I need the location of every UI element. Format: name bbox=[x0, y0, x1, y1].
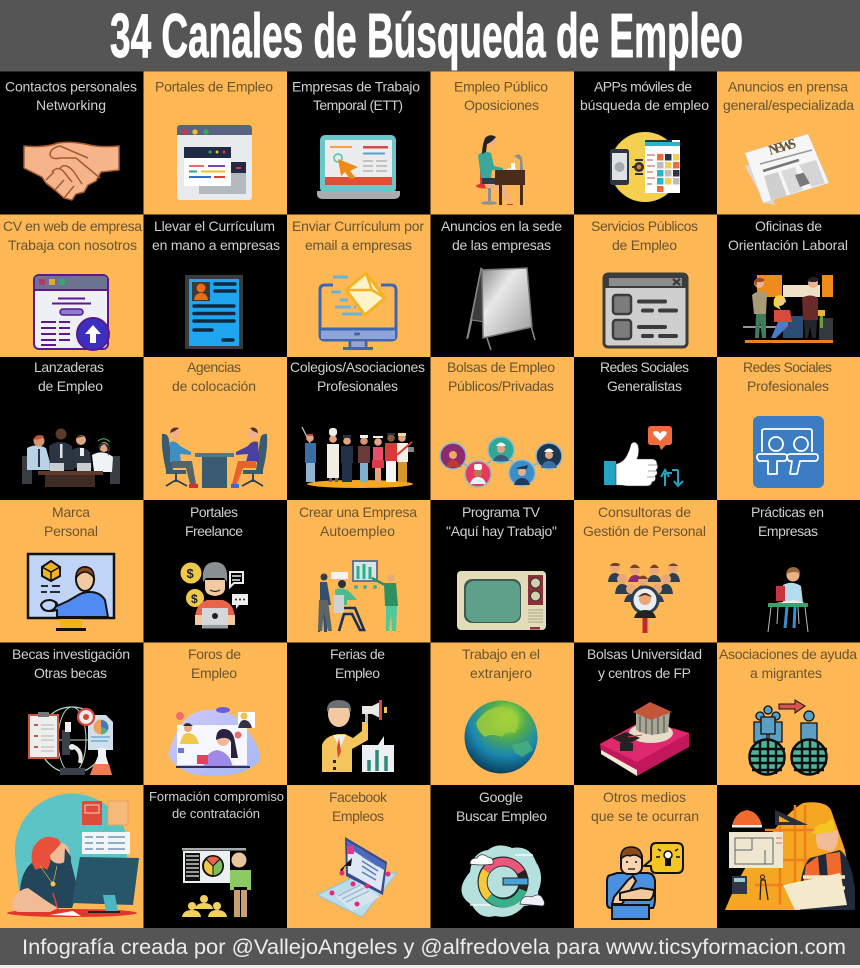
icon: gray window bbox=[604, 274, 687, 347]
panel: Becas investigación bbox=[0, 642, 144, 785]
panel: Redes Sociales Profesionales: Profesionales bbox=[747, 378, 829, 394]
icon: presenter with megaphone bbox=[322, 700, 394, 772]
panel: Empresas de Trabajo Temporal bbox=[287, 72, 430, 214]
icon: migrating people over globes bbox=[749, 700, 827, 775]
icon: team meeting bbox=[22, 428, 120, 487]
panel: Enviar Currículum por email: Enviar Currículum por bbox=[292, 218, 424, 234]
panel: Formación compromiso de contratación: Formación compromiso bbox=[149, 789, 284, 804]
icon: job interview bbox=[162, 428, 267, 488]
panel: Becas investigación: Otras becas bbox=[34, 665, 107, 681]
footer bar bbox=[0, 928, 860, 965]
icon: web form upload bbox=[34, 275, 109, 350]
panel: Consultoras de Gestión de Personal: Gestión de Personal bbox=[583, 523, 706, 539]
panel: Portales de Empleo: Portales de Empleo bbox=[155, 78, 273, 94]
icon: monitor with envelope bbox=[320, 273, 396, 348]
panel: Crear una Empresa: Autoempleo bbox=[320, 523, 395, 539]
panel: Ingeniero con planos bbox=[717, 785, 860, 928]
panel: Facebook Empleos bbox=[287, 785, 430, 928]
icon: laptop with cursor bbox=[317, 135, 400, 199]
panel: Empleo Público Oposiciones bbox=[430, 72, 574, 214]
panel: Anuncios en la sede: de las empresas bbox=[452, 237, 551, 253]
panel: Programa TV bbox=[430, 500, 574, 642]
icon: handshake bbox=[24, 142, 119, 200]
panel: Contactos personales Networking: Networking bbox=[36, 97, 106, 113]
panel: Facebook Empleos: Empleos bbox=[332, 808, 384, 824]
icon: woman on phone at computer bbox=[7, 794, 139, 917]
panel: Servicios Públicos de Empleo: de Empleo bbox=[612, 237, 677, 253]
panel: Asociaciones de ayuda a migrantes bbox=[717, 642, 860, 785]
icon: network of people bbox=[440, 437, 562, 487]
icon: university building on book bbox=[600, 702, 689, 776]
panel: Ferias de Empleo: Ferias de bbox=[330, 646, 385, 662]
panel: Redes Sociales Generalistas bbox=[574, 357, 717, 500]
panel: Colegios/Asociaciones Profesionales bbox=[287, 357, 430, 500]
panel: Foros de Empleo bbox=[144, 642, 287, 785]
panel: Otros medios: que se te ocurran bbox=[591, 808, 699, 824]
panel: Empleo Público Oposiciones: Empleo Público bbox=[454, 78, 548, 94]
panel: Foros de Empleo: Empleo bbox=[191, 665, 237, 681]
panel: Otros medios: Otros medios bbox=[603, 789, 686, 805]
panel: Anuncios en la sede: Anuncios en la sede bbox=[441, 218, 562, 234]
icon: monitor with person bbox=[28, 554, 114, 631]
panel: Consultoras de Gestión de Personal: Consultoras de bbox=[598, 504, 691, 520]
panel: Ferias de Empleo bbox=[287, 642, 430, 785]
panel: Anuncios en prensa bbox=[717, 72, 860, 214]
panel: Lanzaderas de Empleo: Lanzaderas bbox=[34, 359, 104, 375]
panel: Portales Freelance: Freelance bbox=[185, 523, 243, 539]
icon: resume sheet bbox=[185, 275, 243, 349]
panel: Oficinas de Orientación Laboral bbox=[717, 214, 860, 357]
icon: engineer with blueprints bbox=[725, 802, 855, 910]
panel: Crear una Empresa bbox=[287, 500, 430, 642]
panel: CV en web de empresa bbox=[0, 214, 144, 357]
panel: Anuncios en prensa: general/especializada bbox=[723, 97, 854, 113]
panel: Contactos personales Networking: Contactos personales bbox=[5, 78, 137, 94]
panel: Bolsas de Empleo bbox=[430, 357, 574, 500]
panel: Programa TV: "Aquí hay Trabajo" bbox=[446, 523, 557, 539]
panel: Crear una Empresa: Crear una Empresa bbox=[299, 504, 417, 520]
panel: Empleo Público Oposiciones: Oposiciones bbox=[464, 97, 539, 113]
icon: mobile apps circle bbox=[610, 132, 680, 202]
panel: Recepcionista al teléfono bbox=[0, 785, 144, 928]
panel: Redes Sociales Generalistas: Redes Sociales bbox=[600, 359, 689, 375]
panel: Bolsas Universidad bbox=[574, 642, 717, 785]
icon: retro television bbox=[457, 571, 546, 630]
panel: Facebook Empleos: Facebook bbox=[329, 789, 388, 805]
icon: blue rounded square with figures bbox=[753, 416, 824, 488]
panel: Lanzaderas de Empleo: de Empleo bbox=[38, 378, 103, 394]
panel: Empresas de Trabajo Temporal: Empresas de Trabajo bbox=[292, 78, 420, 94]
panel: Colegios/Asociaciones Profesionales: Colegios/Asociaciones bbox=[290, 359, 425, 375]
icon: isometric laptop bbox=[317, 837, 397, 917]
icon: thumbs up and heart bbox=[604, 426, 683, 486]
icon: thinking person with idea bubble bbox=[607, 843, 683, 919]
icon: freelancer: $ bbox=[186, 566, 194, 581]
panel: Prácticas en Empresas bbox=[717, 500, 860, 642]
panel: Bolsas de Empleo: Bolsas de Empleo bbox=[447, 359, 555, 375]
panel: Trabajo en el extranjero: Trabajo en el bbox=[462, 646, 540, 662]
icon: office people bbox=[743, 275, 833, 343]
panel: Enviar Currículum por email bbox=[287, 214, 430, 357]
panel: Formación compromiso de contratación bbox=[144, 785, 287, 928]
panel: Bolsas de Empleo: Públicos/Privadas bbox=[448, 378, 554, 394]
panel: APPs móviles: búsqueda de empleo bbox=[580, 97, 709, 113]
panel: Agencias de colocación bbox=[144, 357, 287, 500]
icon: candidate search bbox=[608, 563, 680, 633]
icon: newspaper: NEWS bbox=[767, 137, 798, 159]
icon: training presentation bbox=[182, 848, 251, 917]
panel: Becas investigación: Becas investigación bbox=[12, 646, 130, 662]
panel: Oficinas de Orientación Laboral: Oficinas de bbox=[755, 218, 822, 234]
panel: Redes Sociales Generalistas: Generalistas bbox=[607, 378, 682, 394]
panel: Foros de Empleo: Foros de bbox=[188, 646, 241, 662]
footer bar: Infografía creada por @VallejoAngeles y @alfredovela para www.ticsyformacion.com bbox=[22, 936, 846, 959]
panel: Oficinas de Orientación Laboral: Orientación Laboral bbox=[728, 237, 848, 253]
panel: Redes Sociales Profesionales: Redes Sociales bbox=[743, 359, 832, 375]
panel: Agencias de colocación: Agencias bbox=[187, 359, 241, 375]
panel: APPs móviles bbox=[574, 72, 717, 214]
icon: A-frame sign board bbox=[467, 268, 535, 350]
icon: woman at desk bbox=[476, 135, 525, 205]
panel: Portales de Empleo bbox=[144, 72, 287, 214]
panel: Otros medios bbox=[574, 785, 717, 928]
panel: Redes Sociales Profesionales bbox=[717, 357, 860, 500]
panel: Anuncios en la sede bbox=[430, 214, 574, 357]
panel: Portales Freelance: Portales bbox=[190, 504, 238, 520]
panel: Contactos personales Networking bbox=[0, 72, 144, 214]
panel: Prácticas en Empresas: Prácticas en bbox=[751, 504, 824, 520]
panel: Trabajo en el extranjero bbox=[430, 642, 574, 785]
icon: earth globe bbox=[464, 700, 538, 774]
panel: Google Buscar Empleo: Google bbox=[479, 789, 523, 805]
panel: Bolsas Universidad: y centros de FP bbox=[598, 665, 691, 681]
icon: student at desk bbox=[768, 567, 808, 632]
panel: Formación compromiso de contratación: de contratación bbox=[172, 806, 260, 821]
icon: newspaper bbox=[745, 134, 829, 205]
panel: Servicios Públicos de Empleo: Servicios Públicos bbox=[591, 218, 698, 234]
panel: Portales Freelance bbox=[144, 500, 287, 642]
icon: group of professionals bbox=[302, 427, 414, 488]
panel: CV en web de empresa: CV en web de empresa bbox=[3, 218, 142, 234]
panel: Agencias de colocación: de colocación bbox=[172, 378, 256, 394]
panel: Enviar Currículum por email: email a empresas bbox=[305, 237, 412, 253]
panel: CV en web de empresa: Trabaja con nosotros bbox=[8, 237, 137, 253]
panel: Google Buscar Empleo bbox=[430, 785, 574, 928]
icon: online forum bbox=[168, 707, 260, 776]
panel: APPs móviles: APPs móviles de bbox=[594, 78, 692, 94]
panel: Google Buscar Empleo: Buscar Empleo bbox=[456, 808, 547, 824]
icon: business team and chart bbox=[318, 560, 398, 632]
panel: Servicios Públicos de Empleo bbox=[574, 214, 717, 357]
panel: Marca Personal: Personal bbox=[44, 523, 98, 539]
panel: Llevar el Currículum bbox=[144, 214, 287, 357]
panel: Prácticas en Empresas: Empresas bbox=[758, 523, 818, 539]
panel: Bolsas Universidad: Bolsas Universidad bbox=[587, 646, 702, 662]
panel: Llevar el Currículum: Llevar el Currículum bbox=[154, 218, 275, 234]
panel: Empresas de Trabajo Temporal: Temporal (ETT) bbox=[313, 97, 403, 113]
panel: Programa TV: Programa TV bbox=[462, 504, 541, 520]
icon: freelancer: $ bbox=[191, 592, 198, 606]
icon: research collage bbox=[29, 707, 113, 775]
panel: Marca Personal: Marca bbox=[52, 504, 90, 520]
panel: Lanzaderas de Empleo bbox=[0, 357, 144, 500]
panel: Asociaciones de ayuda a migrantes: a migrantes bbox=[750, 665, 822, 681]
panel: Anuncios en prensa: Anuncios en prensa bbox=[728, 78, 848, 94]
icon: Google G in cloud bbox=[461, 845, 544, 917]
icon: web portal window bbox=[177, 125, 252, 200]
panel: Ferias de Empleo: Empleo bbox=[335, 665, 380, 681]
panel: Asociaciones de ayuda a migrantes: Asociaciones de ayuda bbox=[719, 646, 857, 662]
icon: freelancer bbox=[180, 562, 248, 628]
panel: Marca Personal bbox=[0, 500, 144, 642]
panel: Llevar el Currículum: en mano a empresas bbox=[152, 237, 280, 253]
panel: Colegios/Asociaciones Profesionales: Profesionales bbox=[317, 378, 398, 394]
panel: Consultoras de Gestión de Personal bbox=[574, 500, 717, 642]
panel: Trabajo en el extranjero: extranjero bbox=[470, 665, 532, 681]
